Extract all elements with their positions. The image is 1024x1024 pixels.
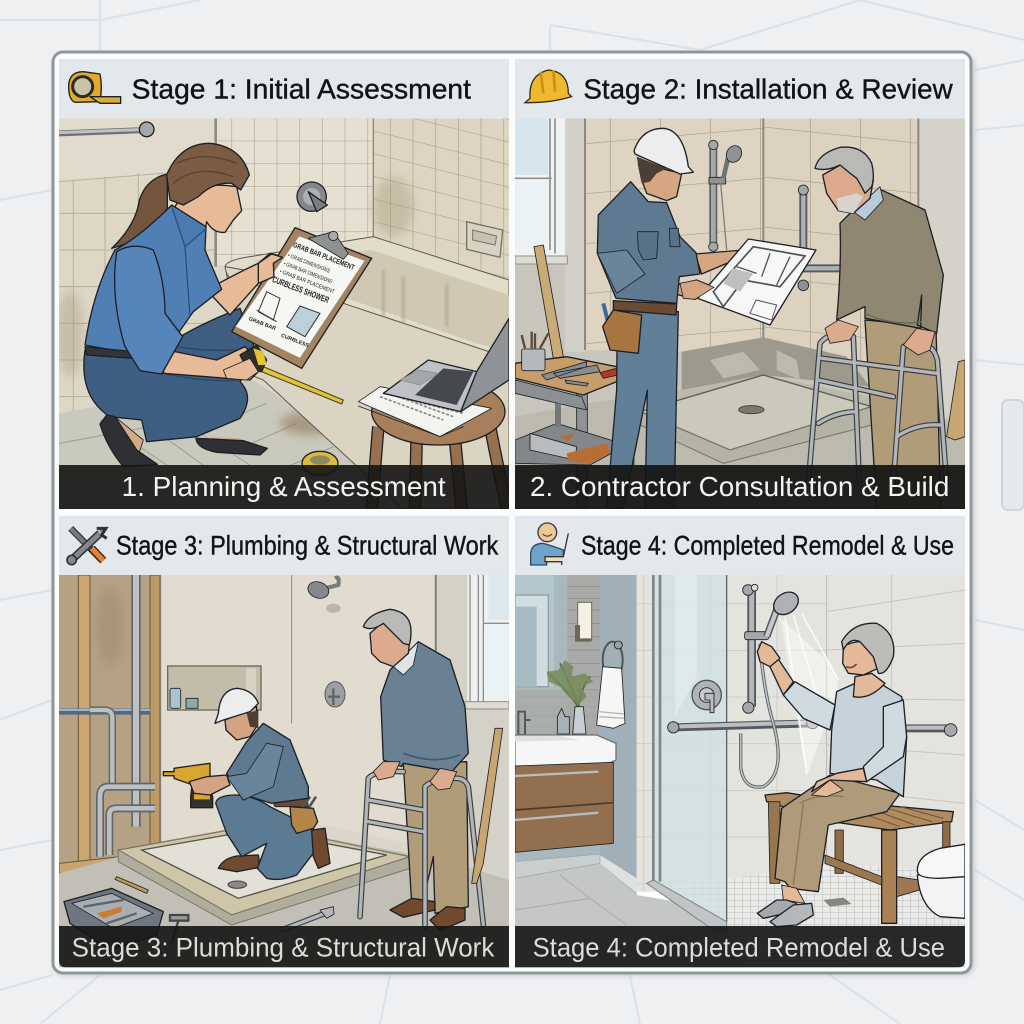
- woman: lower arm and hands: [812, 700, 907, 797]
- worker: pointing hand: [680, 280, 714, 299]
- panel: stage 1: [57, 59, 509, 509]
- niche: [168, 666, 261, 710]
- clipboard: [232, 228, 372, 368]
- woman: shoes: [100, 415, 267, 467]
- faucet: [518, 712, 531, 735]
- towel ring and towel: [597, 641, 625, 728]
- floor: [515, 377, 965, 465]
- heading: stage 1: Stage 1: Initial Assessment: [132, 73, 471, 104]
- drain: [823, 898, 852, 907]
- stool: [372, 378, 507, 509]
- worker: shirt: [227, 723, 308, 803]
- man: sweater: [381, 642, 468, 772]
- woman: ponytail: [112, 174, 167, 248]
- clipboard: CURBLESS SHOWER: [271, 274, 331, 305]
- man: trousers: [865, 320, 941, 509]
- slide rail, hose and spray: [741, 584, 838, 787]
- walker: [808, 334, 947, 483]
- icon: crossed tools: [67, 528, 107, 565]
- header bar: stage 4: [515, 516, 965, 575]
- woman: legs: [775, 775, 900, 892]
- icon: tape measure: [69, 72, 121, 103]
- man: head: [823, 163, 873, 213]
- outer wall: [515, 575, 637, 868]
- walker: [360, 771, 483, 927]
- papers: [358, 387, 492, 437]
- woman: feet: [757, 885, 813, 927]
- caption: stage 2: 2. Contractor Consultation & Build: [530, 471, 949, 502]
- worker: tool pouch: [272, 795, 318, 833]
- panel: stage 3: [59, 516, 509, 969]
- woman: sweater: [830, 683, 907, 797]
- worker: head: [225, 707, 257, 740]
- header bar: stage 1: [59, 59, 509, 118]
- heading: stage 2: Stage 2: Installation & Review: [583, 73, 953, 104]
- soap dish: [467, 222, 503, 257]
- tape roll on floor: [302, 451, 338, 475]
- workbench: [515, 332, 642, 510]
- woman: raised arm: [757, 642, 835, 730]
- clipboard: • GRAB BAR PLACEMENT: [279, 269, 336, 296]
- woman: legs: [84, 308, 258, 442]
- bathtub: [225, 237, 509, 509]
- tool tray: [64, 888, 163, 950]
- panel: stage 4: [515, 516, 965, 969]
- shower tile walls: [587, 118, 763, 352]
- floor: [59, 380, 354, 465]
- panel: stage 2: [515, 59, 965, 510]
- illustration: completed remodel: [515, 575, 965, 969]
- header bar: stage 2: [515, 59, 965, 118]
- woman: shirt: [85, 205, 222, 354]
- exposed wall framing: [59, 575, 161, 873]
- window: [465, 575, 509, 709]
- man: hands: [373, 762, 457, 790]
- worker: arms: [678, 250, 738, 300]
- mirror: [515, 575, 554, 687]
- woman: near arm: [115, 246, 263, 380]
- man: collar: [853, 187, 883, 220]
- tape measure in hand: [223, 345, 267, 380]
- plant and soap: [547, 660, 593, 734]
- caption: stage 3: Stage 3: Plumbing & Structural Work: [72, 933, 495, 963]
- faucet: [297, 182, 327, 212]
- man: hands: [825, 320, 935, 355]
- woman: upper hand: [258, 254, 283, 283]
- shower rail and head: [709, 140, 745, 251]
- leaning board: [472, 728, 503, 883]
- worker: shirt: [597, 182, 700, 303]
- header bar: stage 3: [59, 516, 509, 575]
- caption bar: stage 3: [59, 926, 509, 967]
- mosaic shower floor: [647, 863, 965, 969]
- clipboard: CURBLESS: [280, 333, 310, 349]
- worker: jeans: [607, 307, 678, 509]
- floor tools: [115, 877, 334, 943]
- caption bar: stage 4: [515, 926, 965, 967]
- clipboard: GRAB BAR: [248, 316, 277, 332]
- man: trousers and shoes: [390, 762, 468, 931]
- caption: stage 4: Stage 4: Completed Remodel & Use: [533, 933, 945, 963]
- L grab bar: [798, 185, 840, 291]
- worker: tool belt and pouch: [603, 301, 677, 353]
- grab bar across wall: [668, 717, 957, 736]
- shower wall tiles: [637, 575, 827, 892]
- shower head and valve: [306, 577, 345, 707]
- illustration: assessment scene: [57, 118, 509, 509]
- woman: hair: [167, 143, 249, 205]
- shower pan frame: [118, 825, 410, 925]
- icon: seated person: [531, 523, 568, 565]
- clipboard: GRAB BAR PLACEMENT: [292, 240, 356, 272]
- illustration: contractor consultation: [515, 118, 965, 510]
- floor: [59, 825, 509, 969]
- icon: hard hat: [525, 70, 572, 103]
- caption: stage 1: 1. Planning & Assessment: [122, 471, 446, 502]
- drill: [163, 763, 230, 808]
- glass door: [647, 575, 727, 930]
- tape blade: [262, 367, 343, 404]
- drain: [739, 406, 764, 414]
- clipboard: • GRAB DIMENSIONS: [287, 253, 331, 275]
- man: head: [370, 622, 410, 667]
- woman: forearm to clipboard: [212, 252, 278, 316]
- hard hat: [634, 128, 693, 174]
- man: collar: [393, 642, 418, 675]
- shower valve: [692, 680, 721, 713]
- caption bar: stage 2: [515, 465, 965, 509]
- heading: stage 4: Stage 4: Completed Remodel & Use: [581, 531, 954, 561]
- woman: neck and face: [175, 185, 242, 237]
- vanity: [515, 735, 616, 852]
- bench: [765, 793, 953, 923]
- wall sconce: [575, 602, 592, 642]
- leaning board: [534, 245, 965, 440]
- pipes: [90, 575, 155, 857]
- heading: stage 3: Stage 3: Plumbing & Structural Work: [116, 531, 499, 561]
- blueprint: [698, 239, 816, 325]
- laptop: [383, 318, 509, 412]
- worker: far leg and boots: [216, 795, 330, 879]
- hard hat: [215, 688, 258, 723]
- woman: neck and head: [853, 673, 885, 697]
- caption bar: stage 1: [59, 465, 509, 509]
- illustration: plumbing and structural work: [59, 575, 509, 969]
- toilet: [917, 844, 965, 918]
- clipboard: • GRAB BAR DIMENSIONS: [283, 261, 333, 285]
- worker: head: [638, 163, 682, 201]
- concrete curb: [682, 337, 870, 390]
- wall board: [161, 575, 437, 850]
- floor: [515, 863, 843, 969]
- man: sweater: [837, 190, 943, 333]
- window: [515, 118, 567, 264]
- grab bar: [59, 122, 154, 137]
